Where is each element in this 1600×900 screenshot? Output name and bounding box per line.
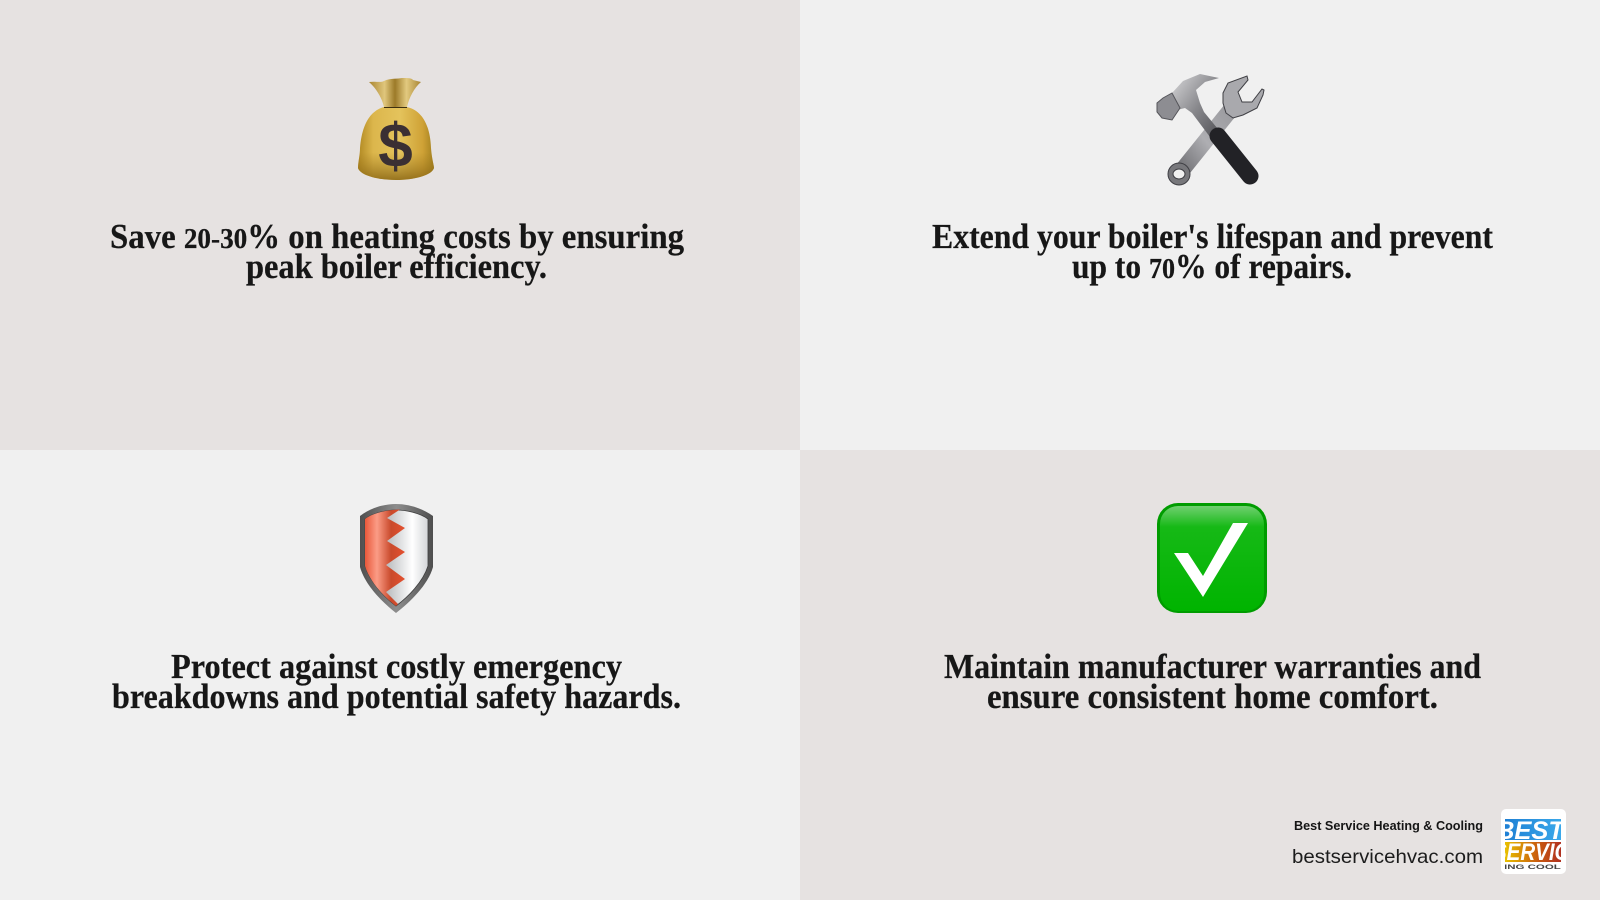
- logo: BEST: [1496, 817, 1567, 845]
- logo: ING COOLI: [1504, 864, 1564, 871]
- heading: protect: [112, 647, 681, 716]
- brand name: Best Service Heating & Cooling: [1294, 818, 1483, 833]
- icon: money bag: $: [378, 112, 413, 181]
- heading: extend lifespan: up to 70% of repairs.: [1072, 247, 1352, 286]
- heading: save costs: peak boiler efficiency.: [246, 247, 547, 286]
- icon: shield: [360, 504, 433, 613]
- panel: save on heating costs: [0, 0, 800, 450]
- icon: check mark: [1157, 503, 1267, 613]
- panel: extend lifespan: [800, 0, 1600, 450]
- logo: SERVICE: [1493, 839, 1584, 866]
- heading: extend lifespan: Extend your boiler's lifespan and prevent: [932, 217, 1493, 256]
- heading: save costs: Save 20-30% on heating costs by ensuring: [110, 217, 684, 256]
- heading: warranties: ensure consistent home comfort.: [987, 677, 1438, 716]
- panel: protect against breakdowns: [0, 450, 800, 900]
- heading: warranties: Maintain manufacturer warranties and: [944, 647, 1481, 686]
- heading: warranties: [944, 647, 1481, 716]
- icon: hammer and wrench: [1157, 74, 1264, 185]
- heading: save costs: [110, 217, 684, 286]
- logo: [1501, 809, 1566, 874]
- heading: protect: Protect against costly emergency: [171, 647, 622, 686]
- icon: money bag: [358, 78, 434, 181]
- website: bestservicehvac.com: [1292, 846, 1483, 868]
- panel: maintain warranties: [800, 450, 1600, 900]
- heading: protect: breakdowns and potential safety hazards.: [112, 677, 681, 716]
- heading: extend lifespan: [932, 217, 1493, 286]
